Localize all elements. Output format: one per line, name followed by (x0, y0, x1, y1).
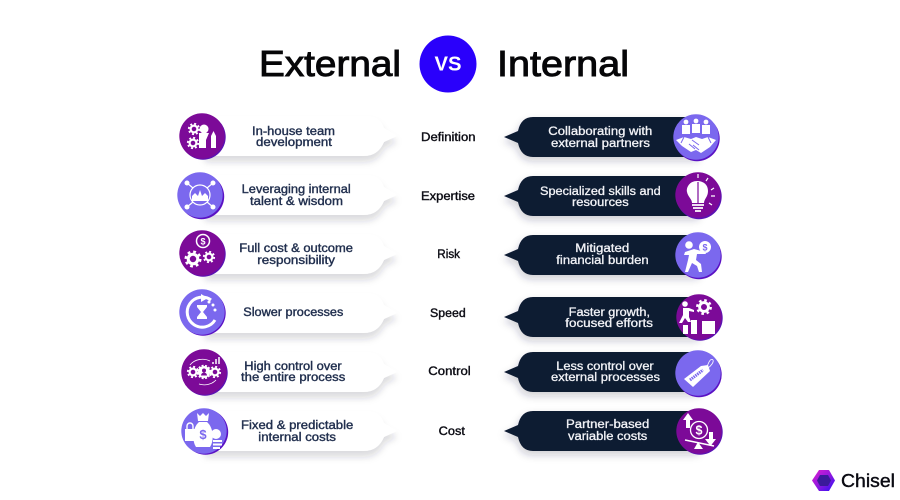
icon: money bag, lock and coins (181, 408, 228, 455)
label: Speed: Speed (430, 308, 466, 320)
label: Expertise: Expertise (421, 191, 475, 203)
row: Expertise (177, 172, 722, 219)
icon: person climbing steps with gear (676, 294, 723, 341)
left bubble: In-house team development: In-house team (252, 126, 335, 138)
right bubble: Less control over external processes: Less control over (556, 361, 654, 373)
right bubble: Less control over external processes: external processes (551, 372, 660, 384)
left bubble: In-house team development: development (256, 137, 333, 149)
label: Definition: Definition (421, 132, 476, 144)
icon: brain light bulb (675, 172, 722, 219)
logo: Chisel (812, 470, 895, 491)
left bubble: Slower processes: Slower processes (243, 307, 344, 319)
wordmark: Chisel (841, 471, 895, 491)
icon: dollar on a balance with arrows (676, 408, 723, 455)
right bubble: Collaborating with external partners: Collaborating with (548, 126, 652, 138)
left bubble: High control over the entire process (205, 352, 397, 392)
right bubble: Mitigated financial burden: Mitigated (575, 243, 629, 255)
left bubble: Leveraging internal talent & wisdom: Leveraging internal (242, 184, 351, 196)
right bubble: Faster growth, focused efforts: focused efforts (565, 318, 653, 330)
left bubble: High control over the entire process: the entire process (241, 372, 346, 384)
row: Risk (179, 230, 722, 279)
left bubble: Full cost & outcome responsibility: responsibility (257, 255, 335, 267)
row: Control (181, 349, 722, 397)
right bubble: Less control over external processes (504, 352, 700, 392)
icon: gears and head (179, 113, 226, 160)
icon: hexagon (812, 470, 835, 491)
right bubble: Partner-based variable costs (504, 411, 700, 451)
title (259, 36, 629, 92)
left bubble: Leveraging internal talent & wisdom: talent & wisdom (250, 196, 343, 208)
icon: gears and dollar coin (179, 230, 226, 277)
left bubble: Slower processes (205, 293, 397, 333)
left bubble: Fixed & predictable internal costs: internal costs (258, 432, 336, 444)
label: Risk: Risk (437, 249, 460, 261)
right bubble: Mitigated financial burden (504, 235, 700, 275)
icon: handshake and people (673, 114, 720, 161)
icon: hourglass in circular arrow (179, 289, 226, 336)
right bubble: Partner-based variable costs: variable costs (568, 431, 648, 443)
badge: vs: VS (434, 54, 462, 76)
right bubble: Collaborating with external partners: external partners (551, 138, 650, 150)
left bubble: Fixed & predictable internal costs: Fixed & predictable (241, 420, 353, 432)
label: Cost: Cost (439, 426, 466, 438)
badge: vs (420, 36, 476, 92)
right bubble: Faster growth, focused efforts (504, 297, 700, 337)
icon: gears with person (181, 349, 228, 396)
left bubble: Leveraging internal talent & wisdom (205, 175, 397, 215)
left bubble: High control over the entire process: High control over (244, 361, 342, 373)
row: Cost (181, 408, 723, 455)
left bubble: Full cost & outcome responsibility: Full cost & outcome (239, 243, 353, 255)
icon: dollar on a balance with arrows: $ (696, 424, 703, 438)
icon: money bag, lock and coins: $ (199, 427, 207, 442)
icon: limited price tag (675, 350, 722, 397)
left bubble: Full cost & outcome responsibility (205, 234, 397, 274)
right bubble: Specialized skills and resources: Specialized skills and (540, 186, 661, 198)
heading: Internal: Internal (497, 43, 629, 84)
row: Definition (179, 113, 720, 161)
right bubble: Specialized skills and resources: resources (572, 197, 629, 209)
icon: gears and dollar coin: $ (200, 236, 206, 246)
right bubble: Faster growth, focused efforts: Faster growth, (569, 307, 650, 319)
icon: network of people (177, 172, 224, 219)
left bubble: Fixed & predictable internal costs (205, 411, 397, 451)
icon: person carrying coin: $ (702, 242, 708, 252)
right bubble: Collaborating with external partners (504, 117, 700, 157)
left bubble: In-house team development (205, 116, 397, 156)
right bubble: Partner-based variable costs: Partner-based (566, 419, 649, 431)
right bubble: Specialized skills and resources (504, 176, 700, 216)
right bubble: Mitigated financial burden: financial burden (556, 255, 649, 267)
row: Speed (179, 289, 723, 341)
heading: External: External (259, 43, 401, 84)
label: Control: Control (428, 366, 471, 378)
icon: person carrying coin (675, 232, 722, 279)
